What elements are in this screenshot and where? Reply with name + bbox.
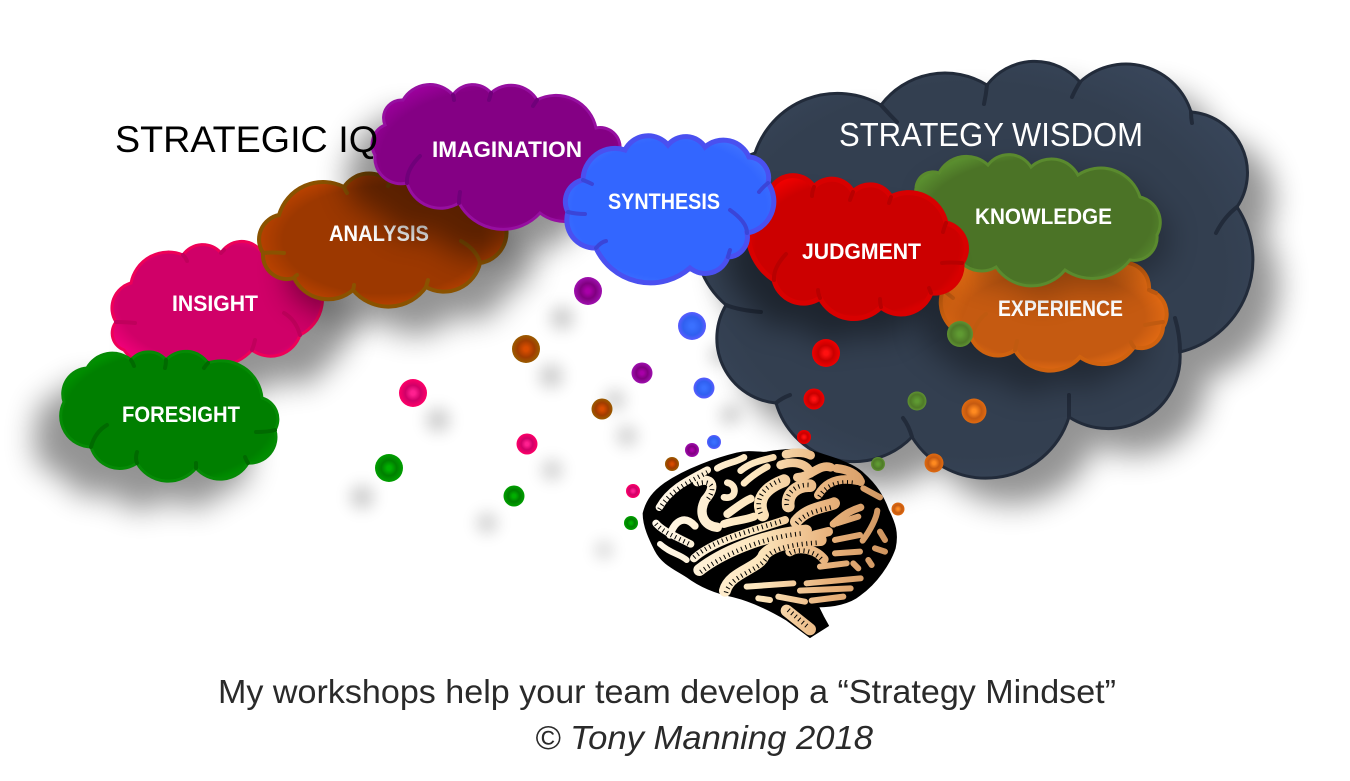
bubbles: insight trail bbox=[399, 379, 640, 498]
brain hatching bbox=[656, 472, 856, 627]
decorative ball shadows bbox=[350, 306, 740, 558]
label: insight: INSIGHT bbox=[172, 291, 259, 316]
label: synthesis: SYNTHESIS bbox=[608, 189, 720, 214]
heading: strategic iq: STRATEGIC IQ bbox=[115, 119, 378, 160]
caption: copyright: © Tony Manning 2018 bbox=[535, 719, 874, 756]
bubbles: analysis trail bbox=[512, 335, 679, 471]
cloud: knowledge shadow bbox=[926, 167, 1170, 298]
label: foresight: FORESIGHT bbox=[122, 402, 241, 427]
caption: workshops line: My workshops help your team develop a “Strategy Mindset” bbox=[218, 673, 1116, 710]
label: judgment: JUDGMENT bbox=[802, 239, 922, 264]
brain folds bbox=[656, 453, 885, 629]
cloud: judgment shadow bbox=[726, 200, 944, 343]
bubbles: experience trail bbox=[892, 398, 986, 516]
label: knowledge: KNOWLEDGE bbox=[975, 204, 1112, 229]
bubbles: synthesis trail bbox=[678, 312, 721, 449]
label: imagination: IMAGINATION bbox=[432, 137, 582, 162]
cloud: imagination shadow bbox=[345, 113, 597, 257]
bubbles: foresight trail bbox=[375, 454, 638, 530]
cloud: strategy wisdom shadow bbox=[721, 87, 1279, 504]
cloud: foresight bbox=[61, 351, 278, 481]
cloud: synthesis bbox=[565, 136, 774, 283]
icon: brain bbox=[643, 450, 896, 637]
bubbles: imagination trail bbox=[574, 277, 699, 457]
cloud: insight shadow bbox=[139, 269, 349, 395]
cloud: imagination bbox=[372, 85, 624, 229]
bubbles: judgment trail bbox=[797, 339, 840, 444]
cloud: strategy wisdom bbox=[695, 61, 1253, 478]
cloud: analysis bbox=[259, 173, 507, 307]
heading: strategy wisdom: STRATEGY WISDOM bbox=[839, 116, 1143, 153]
label: experience: EXPERIENCE bbox=[998, 296, 1123, 321]
cloud: experience shadow bbox=[921, 285, 1147, 393]
cloud: foresight shadow bbox=[34, 379, 251, 509]
cloud: knowledge bbox=[915, 155, 1160, 286]
cloud: judgment bbox=[748, 176, 966, 319]
cloud: analysis shadow bbox=[286, 201, 534, 335]
label: analysis: ANALYSIS bbox=[329, 221, 429, 246]
cloud: experience bbox=[941, 263, 1167, 371]
cloud: insight bbox=[112, 241, 322, 367]
bubbles: knowledge trail bbox=[871, 321, 973, 471]
